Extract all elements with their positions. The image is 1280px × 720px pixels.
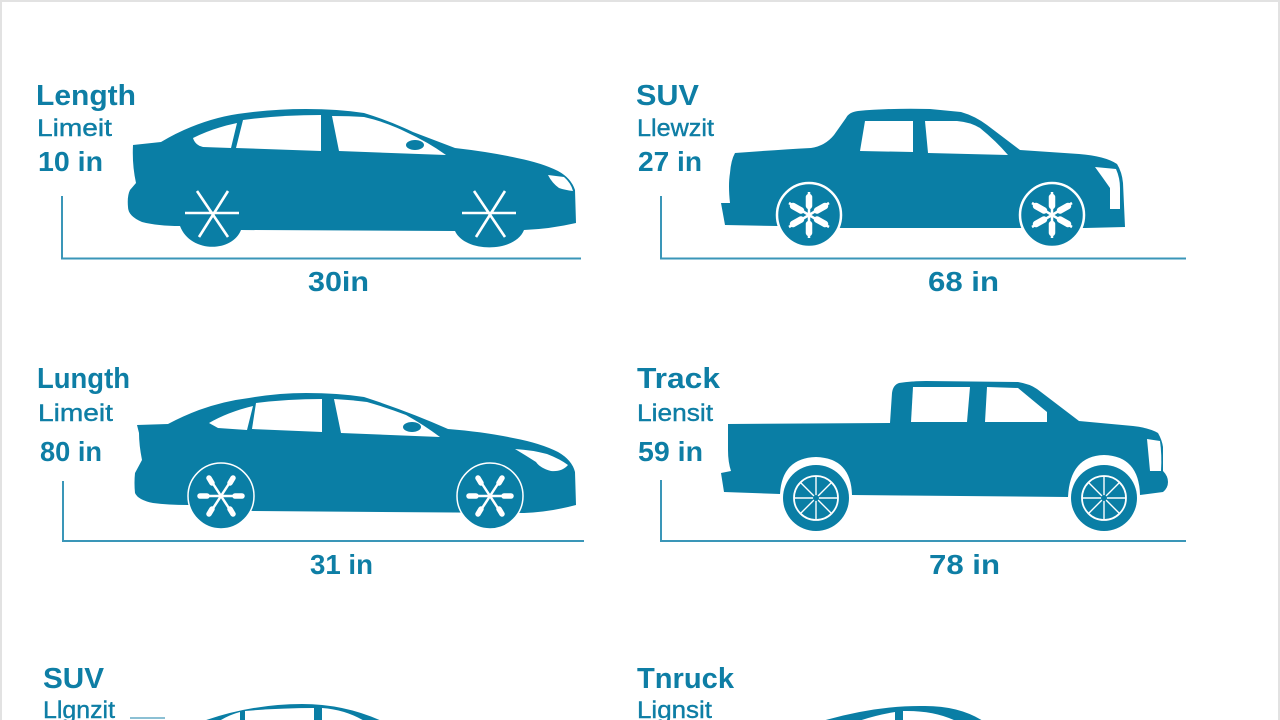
heading: Truck: Tnruck	[637, 663, 735, 695]
panel: second sedan	[37, 363, 584, 580]
value: height 10 in: 10 in	[38, 146, 103, 177]
value: height 27 in: 27 in	[638, 146, 702, 177]
icon: pickup truck	[721, 381, 1168, 531]
value: length 31 in: 31 in	[310, 549, 373, 580]
panel: sedan length	[36, 80, 581, 297]
value: height 80 in: 80 in	[40, 436, 102, 467]
heading: Lungth: Lungth	[37, 363, 130, 395]
icon: car roof (cropped)	[130, 704, 392, 720]
label: limit: Limeit	[37, 115, 112, 142]
value: height 59 in: 59 in	[638, 436, 703, 467]
panel: truck	[637, 363, 1186, 580]
value: length 78 in: 78 in	[929, 549, 1000, 580]
icon: car roof (cropped)	[806, 706, 990, 720]
heading: Length: Length	[36, 80, 136, 112]
heading: Track: Track	[637, 363, 721, 395]
icon: sedan car	[128, 109, 576, 247]
axis lines	[62, 196, 581, 258]
label: limit: Liensit	[637, 400, 713, 427]
axis lines	[661, 196, 1186, 258]
axis lines	[661, 480, 1186, 541]
panel: bottom truck (cropped)	[637, 663, 990, 720]
value: length 30 in: 30in	[308, 266, 369, 297]
heading: SUV: SUV	[636, 80, 700, 112]
value: length 68 in: 68 in	[928, 266, 999, 297]
label: limit: Llewzit	[637, 115, 714, 142]
panel: SUV	[636, 80, 1186, 297]
icon: sedan car	[134, 393, 576, 529]
panel: bottom SUV (cropped)	[43, 663, 392, 720]
axis lines	[63, 481, 584, 541]
heading: SUV: SUV	[43, 663, 105, 695]
icon: SUV	[721, 109, 1125, 247]
label: limit: Limeit	[38, 400, 113, 427]
